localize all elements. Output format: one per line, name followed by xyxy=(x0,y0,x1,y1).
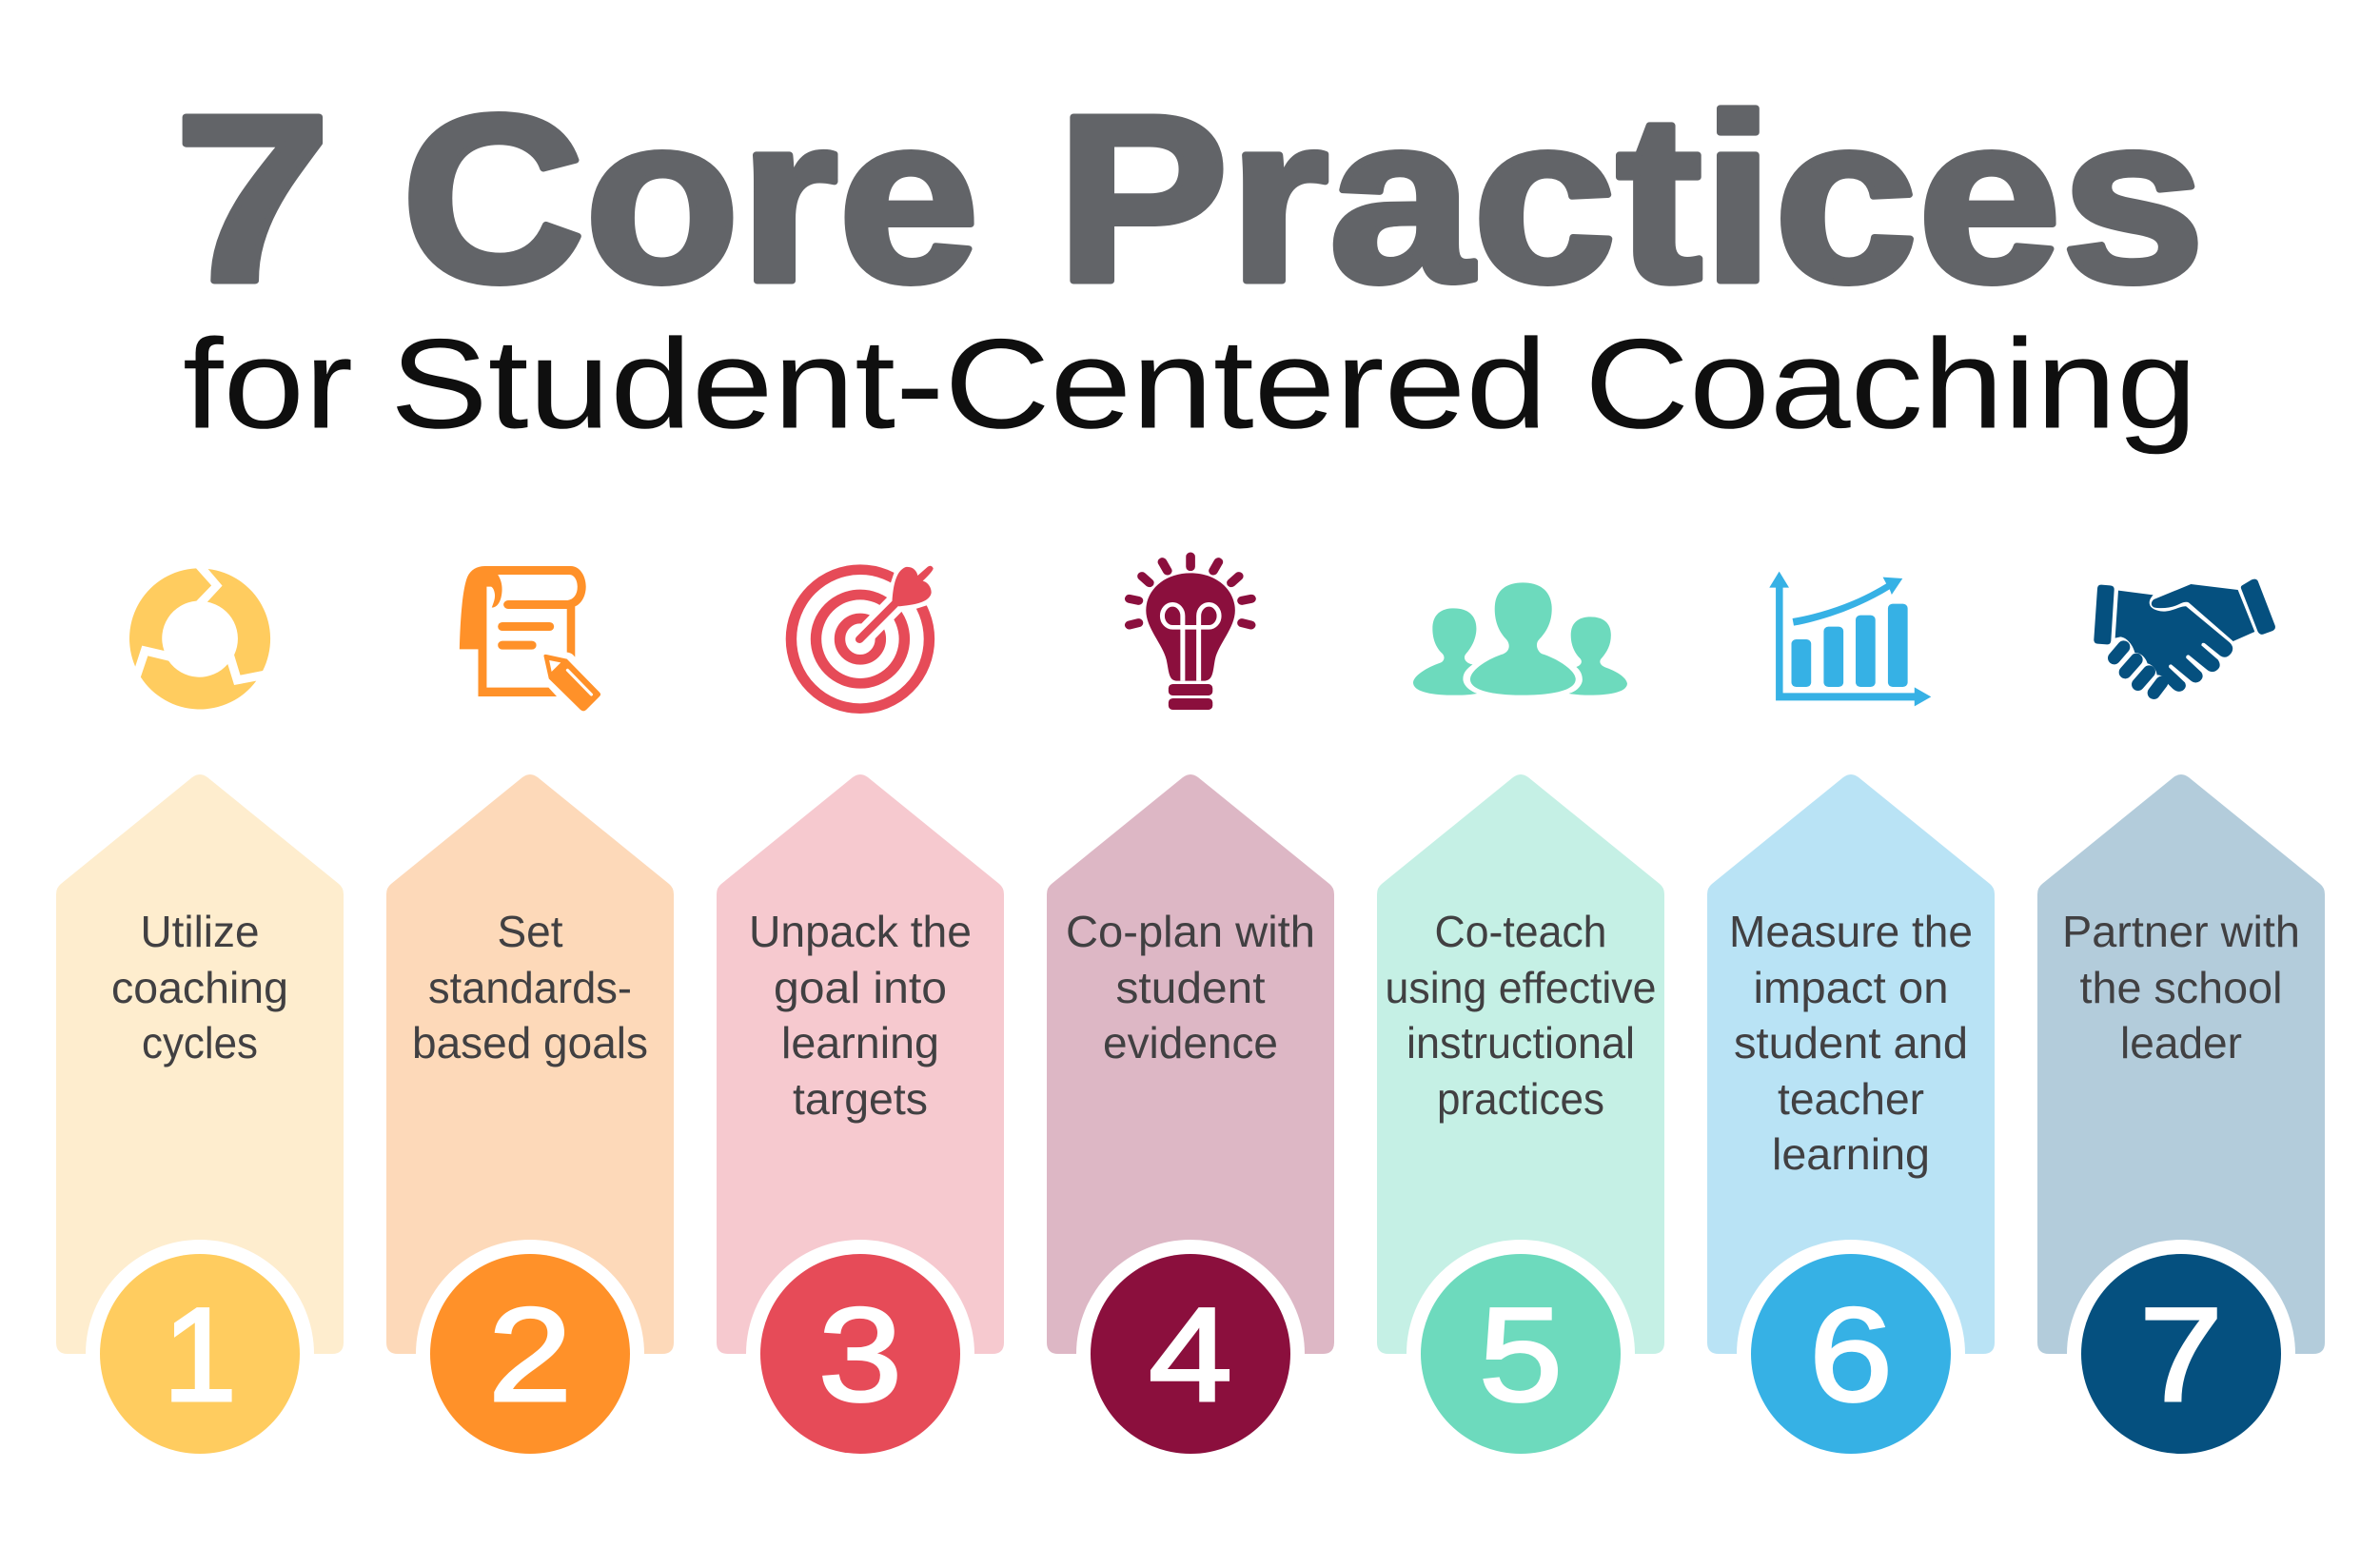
number badge 1 xyxy=(86,1240,314,1468)
subtitle: Student-Centered xyxy=(390,314,1547,455)
text: practice 5: Co-teach xyxy=(1435,907,1606,956)
number badge 7 xyxy=(2067,1240,2295,1468)
title: Core xyxy=(402,66,979,331)
text: practice 3: learning xyxy=(781,1018,939,1067)
number badge 3: 3 xyxy=(818,1280,902,1429)
text: practice 7: the school xyxy=(2080,963,2282,1012)
icon: cycle arrows xyxy=(129,568,270,710)
title: 7 xyxy=(174,66,331,331)
text: practice 5: practices xyxy=(1437,1074,1604,1124)
panel 3: unpack the goal xyxy=(717,774,1004,1468)
panel 2: set standards-based goals xyxy=(386,774,674,1468)
text: practice 3: targets xyxy=(793,1074,928,1124)
text: practice 3: goal into xyxy=(774,963,947,1012)
text: practice 6 xyxy=(1729,907,1973,1179)
text: practice 6: learning xyxy=(1772,1129,1930,1179)
number badge 7: 7 xyxy=(2139,1280,2223,1429)
panel 1: utilize coaching cycles xyxy=(56,774,344,1468)
title: Practices xyxy=(1056,66,2205,331)
number badge 4: 4 xyxy=(1149,1280,1232,1429)
text: practice 2: based goals xyxy=(412,1018,648,1067)
text: practice 7 xyxy=(2062,907,2300,1067)
icon: target and dart xyxy=(791,561,941,709)
icon: growth chart xyxy=(1769,572,1931,706)
text: practice 3: Unpack the xyxy=(749,907,972,956)
text: practice 4 xyxy=(1066,907,1315,1067)
subtitle xyxy=(183,314,2197,455)
number badge 1: 1 xyxy=(163,1280,237,1429)
text: practice 2 xyxy=(412,907,648,1067)
icon: scroll and pencil xyxy=(460,566,600,711)
text: practice 6: teacher xyxy=(1778,1074,1924,1124)
text: practice 2: Set xyxy=(497,907,563,956)
subtitle: for xyxy=(183,314,353,455)
text: practice 6: student and xyxy=(1734,1018,1968,1067)
panel 4: co-plan with student evidence xyxy=(1047,774,1334,1468)
number badge 2: 2 xyxy=(488,1280,572,1429)
text: practice 6: Measure the xyxy=(1729,907,1973,956)
text: practice 5: using effective xyxy=(1386,963,1656,1012)
icon: three people xyxy=(1413,582,1627,695)
text: practice 2: standards- xyxy=(428,963,632,1012)
text: practice 6: impact on xyxy=(1753,963,1949,1012)
text: practice 5 xyxy=(1386,907,1656,1124)
text: practice 1 xyxy=(111,907,288,1067)
text: practice 4: Co-plan with xyxy=(1066,907,1315,956)
panel 5: co-teach xyxy=(1377,774,1664,1468)
number badge 6 xyxy=(1737,1240,1965,1468)
text: practice 3 xyxy=(749,907,972,1124)
text: practice 1: coaching xyxy=(111,963,288,1012)
number badge 3 xyxy=(746,1240,974,1468)
number badge 6: 6 xyxy=(1809,1280,1893,1429)
number badge 4 xyxy=(1076,1240,1305,1468)
icon: handshake xyxy=(2094,579,2275,693)
number badge 5: 5 xyxy=(1479,1280,1563,1429)
number badge 5 xyxy=(1406,1240,1635,1468)
text: practice 4: student xyxy=(1115,963,1266,1012)
text: practice 4: evidence xyxy=(1103,1018,1278,1067)
text: practice 7: Partner with xyxy=(2062,907,2300,956)
panel 7: partner with the school leader xyxy=(2037,774,2325,1468)
text: practice 5: instructional xyxy=(1406,1018,1635,1067)
title xyxy=(174,66,2205,331)
subtitle: Coaching xyxy=(1584,314,2197,455)
panel 6: measure the impact xyxy=(1707,774,1995,1468)
text: practice 1: cycles xyxy=(142,1018,258,1067)
text: practice 1: Utilize xyxy=(141,907,259,956)
icon: light bulb xyxy=(1130,557,1251,710)
text: practice 7: leader xyxy=(2120,1018,2242,1067)
number badge 2 xyxy=(416,1240,644,1468)
